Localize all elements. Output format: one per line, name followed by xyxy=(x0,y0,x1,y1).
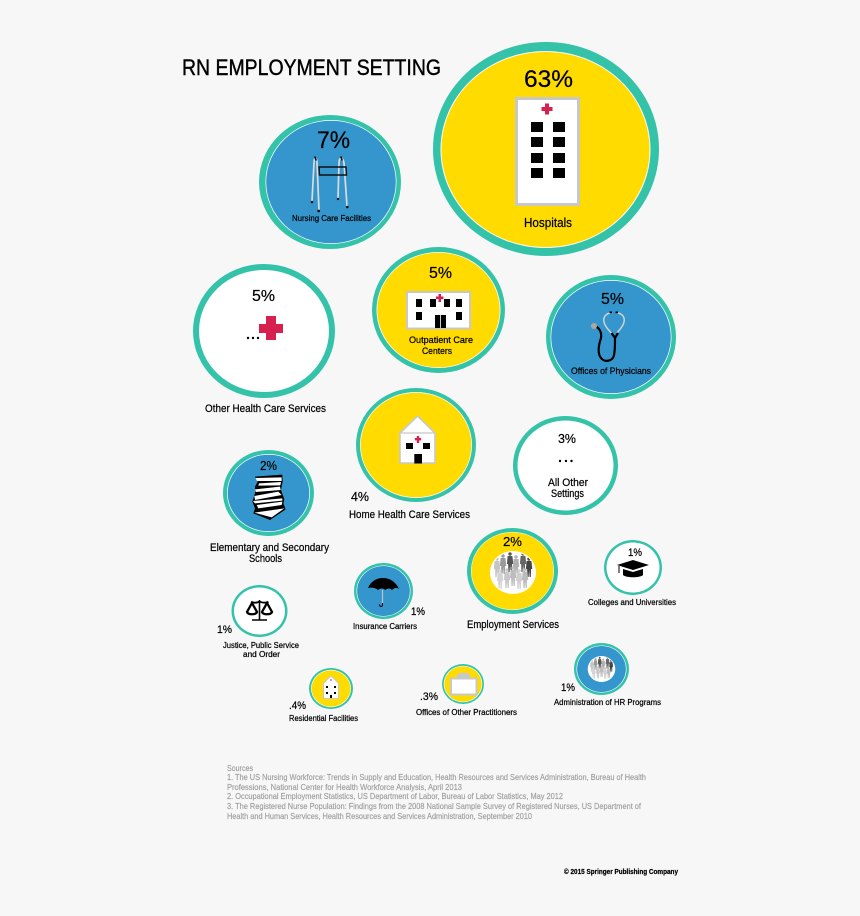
panel: insurance carriers xyxy=(353,563,425,631)
panel: home health care services xyxy=(349,388,476,521)
icon: red cross and dots xyxy=(247,316,283,340)
icon: walker xyxy=(311,157,349,212)
panel: other health care services xyxy=(193,264,335,415)
panel: all other settings xyxy=(513,416,618,515)
panel: justice, public service and order: 1% xyxy=(217,624,232,636)
panel: colleges and universities: Colleges and Universities xyxy=(588,598,676,607)
panel: nursing care facilities xyxy=(259,115,401,249)
panel: insurance carriers: Insurance Carriers xyxy=(353,622,417,631)
panel: elementary and secondary schools: 2% xyxy=(260,458,277,473)
icon: crowd of people xyxy=(588,656,615,682)
title: RN EMPLOYMENT SETTING xyxy=(182,55,441,80)
sources: Professions, National Center for Health Workforce Analysis, April 2013 xyxy=(227,782,462,792)
panel: administration of hr programs: Administration of HR Programs xyxy=(554,698,661,707)
panel: colleges and universities: 1% xyxy=(628,547,642,559)
panel: justice, public service and order: Justice, Public Service xyxy=(223,641,300,650)
sources xyxy=(227,763,646,821)
icon: crowd of people xyxy=(490,551,536,594)
panel: offices of physicians: 5% xyxy=(601,291,624,308)
icon: house xyxy=(400,416,435,464)
panel: elementary and secondary schools: Schools xyxy=(249,553,282,565)
panel: all other settings: Settings xyxy=(551,488,584,500)
panel: justice, public service and order: and Order xyxy=(243,650,280,659)
panel: home health care services: Home Health Care Services xyxy=(349,509,470,521)
icon: hospital building xyxy=(516,98,578,204)
panel: all other settings: 3% xyxy=(558,431,576,446)
panel: residential facilities: .4% xyxy=(289,700,306,712)
panel: offices of other practitioners: Offices of Other Practitioners xyxy=(416,708,517,717)
panel: hospitals xyxy=(433,42,659,256)
icon: briefcase xyxy=(451,673,476,694)
panel: offices of other practitioners: .3% xyxy=(420,691,438,703)
panel: elementary and secondary schools: Elementary and Secondary xyxy=(210,542,329,554)
panel: employment services: 2% xyxy=(503,534,522,549)
icon: umbrella xyxy=(368,578,399,606)
sources: Sources xyxy=(227,763,253,773)
panel: residential facilities xyxy=(289,668,358,723)
panel: other health care services: 5% xyxy=(252,288,275,305)
panel: outpatient care centers: Centers xyxy=(422,346,452,357)
sources: 1. The US Nursing Workforce: Trends in Supply and Education, Health Resources and Services Administration, Bureau of Health xyxy=(227,772,646,782)
sources: 3. The Registered Nurse Population: Findings from the 2008 National Sample Survey of Registered Nurses, US Department of xyxy=(227,801,642,811)
icon: stack of books xyxy=(252,475,286,520)
panel: elementary and secondary schools xyxy=(210,450,329,565)
panel: employment services xyxy=(467,528,559,631)
panel: administration of hr programs: 1% xyxy=(561,682,575,694)
icon: dots xyxy=(559,460,573,462)
icon: residential house xyxy=(324,676,338,698)
panel: all other settings: All Other xyxy=(548,477,588,489)
panel: nursing care facilities: Nursing Care Facilities xyxy=(292,214,371,223)
panel: insurance carriers: 1% xyxy=(411,606,425,618)
icon: scales of justice xyxy=(247,600,272,620)
panel: outpatient care centers: Outpatient Care xyxy=(409,335,473,346)
icon: stethoscope xyxy=(591,312,624,361)
panel: home health care services: 4% xyxy=(351,489,369,504)
panel: justice, public service and order xyxy=(217,585,300,659)
sources: Health and Human Services, Health Resources and Services Administration, September 2010 xyxy=(227,811,532,821)
panel: outpatient care centers: 5% xyxy=(429,265,452,282)
panel: outpatient care centers xyxy=(372,247,505,373)
icon: outpatient building xyxy=(407,292,470,328)
panel: residential facilities: Residential Facilities xyxy=(289,714,358,723)
icon: graduation cap xyxy=(617,560,649,577)
panel: offices of physicians: Offices of Physicians xyxy=(571,366,651,376)
panel: offices of other practitioners xyxy=(416,664,517,717)
panel: hospitals: Hospitals xyxy=(524,215,572,230)
copyright: © 2015 Springer Publishing Company xyxy=(564,868,678,876)
panel: hospitals: 63% xyxy=(524,66,573,93)
panel: nursing care facilities: 7% xyxy=(317,127,350,154)
sources: 2. Occupational Employment Statistics, US Department of Labor, Bureau of Labor Statistics, May 2012 xyxy=(227,791,563,801)
panel: colleges and universities xyxy=(588,540,676,607)
panel: offices of physicians xyxy=(546,275,676,399)
panel: employment services: Employment Services xyxy=(467,619,559,631)
panel: other health care services: Other Health Care Services xyxy=(205,403,326,415)
panel: administration of hr programs xyxy=(554,643,661,707)
